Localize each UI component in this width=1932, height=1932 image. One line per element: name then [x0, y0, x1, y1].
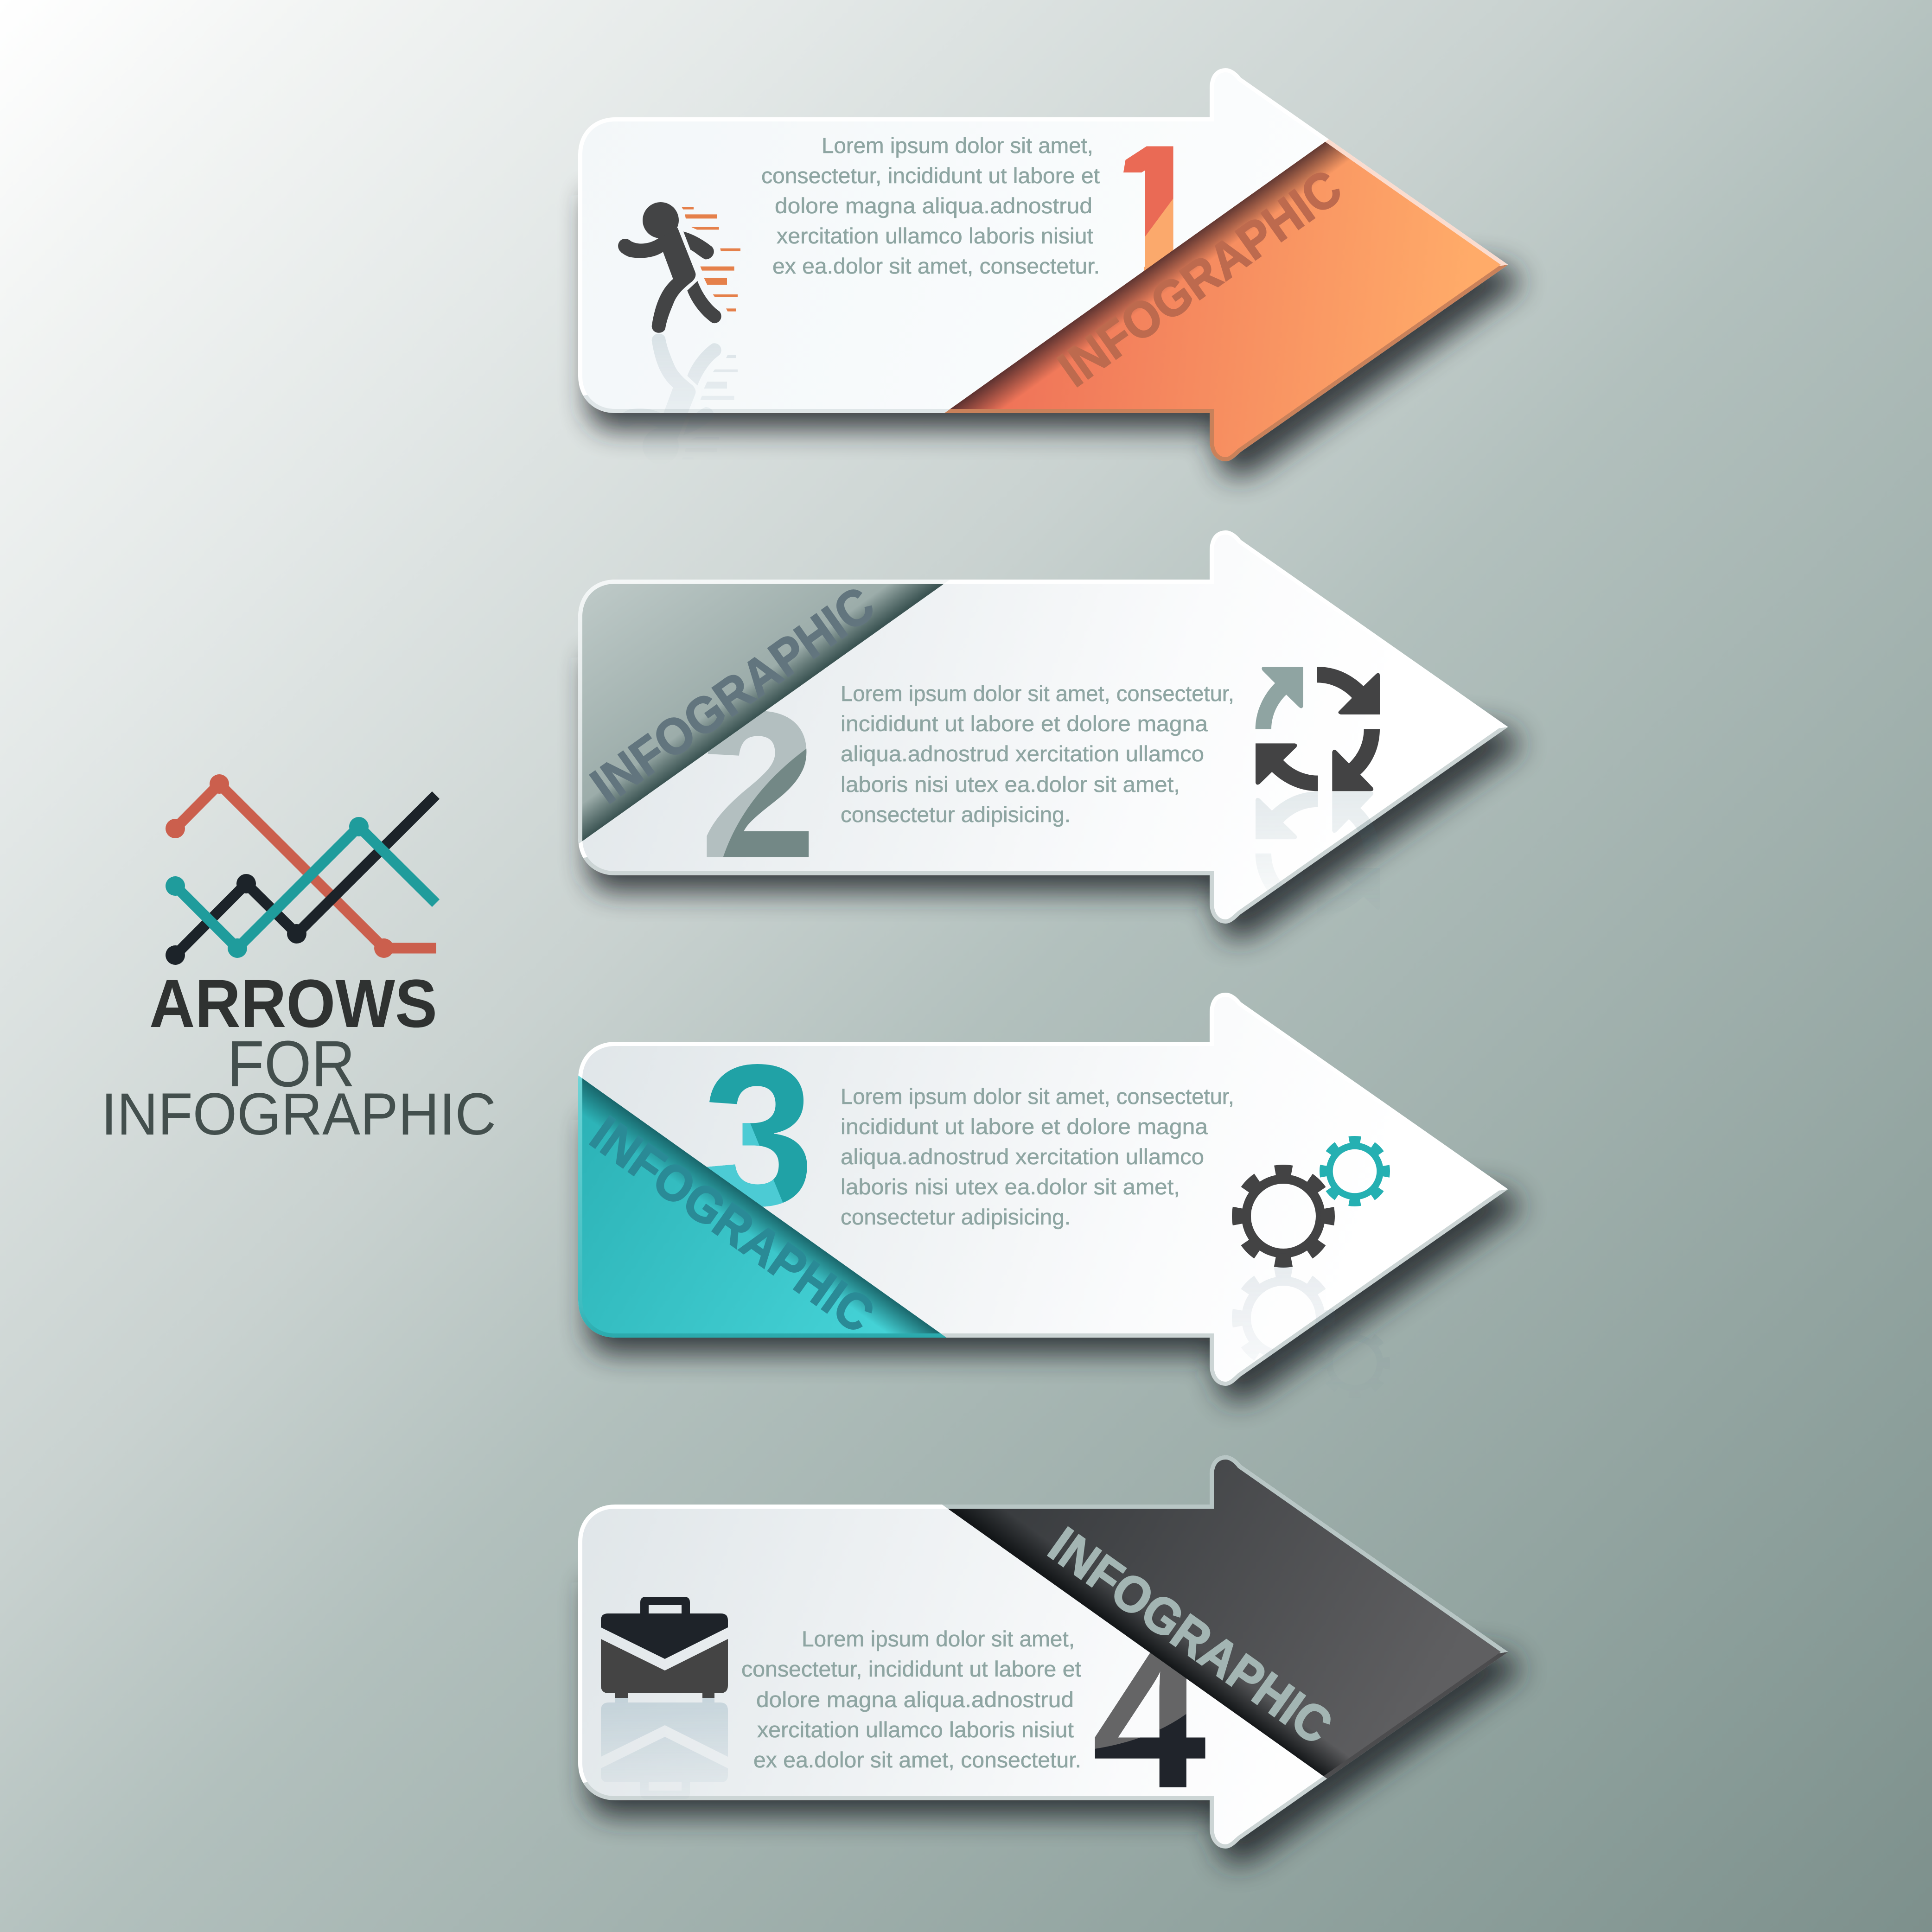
text block 2 — [841, 681, 1234, 827]
numeral 3: 3 — [702, 1022, 814, 1247]
text block 2: Lorem ipsum dolor sit amet, consectetur, — [841, 681, 1234, 706]
text block 3: Lorem ipsum dolor sit amet, consectetur, — [841, 1084, 1234, 1109]
logo: chart and title — [101, 774, 496, 1148]
numeral 3: 3 — [702, 1022, 814, 1247]
title: INFOGRAPHIC: INFOGRAPHIC — [101, 1081, 496, 1148]
text block 3: laboris nisi utex ea.dolor sit amet, — [841, 1174, 1180, 1199]
dark line — [166, 795, 436, 965]
icon reflection: gears — [1239, 1274, 1385, 1394]
text block 1: consectetur, incididunt ut labore et — [761, 163, 1100, 188]
title: ARROWS: ARROWS — [149, 966, 437, 1042]
icon: gears — [1239, 1141, 1385, 1261]
numeral 1: 1 — [1097, 102, 1211, 332]
text block 3: consectetur adipisicing. — [841, 1205, 1071, 1229]
text block 2: incididunt ut labore et dolore magna — [841, 711, 1208, 736]
icon reflection: runner — [623, 334, 738, 413]
numeral 1: 1 — [1097, 102, 1211, 332]
panel: arrow 3 — [580, 997, 1523, 1402]
teal ribbon — [582, 997, 1501, 1382]
numeral 1 — [1123, 147, 1173, 271]
text block 1: xercitation ullamco laboris nisiut — [777, 223, 1093, 248]
orange ribbon — [944, 139, 1508, 461]
numeral 2: 2 — [701, 670, 816, 900]
text block 1: Lorem ipsum dolor sit amet, — [822, 133, 1093, 158]
text block 4: ex ea.dolor sit amet, consectetur. — [753, 1747, 1081, 1772]
teal line — [166, 817, 436, 958]
text block 4 — [741, 1626, 1081, 1772]
panel: arrow 4 — [582, 1460, 1523, 1865]
red line — [166, 774, 436, 958]
text block 4: xercitation ullamco laboris nisiut — [757, 1717, 1074, 1742]
text block 1: dolore magna aliqua.adnostrud — [775, 193, 1092, 218]
icon: runner — [618, 202, 740, 333]
text block 3: incididunt ut labore et dolore magna — [841, 1114, 1208, 1139]
icon: cycle arrows — [1256, 667, 1380, 791]
ribbon label: INFOGRAPHIC — [580, 1105, 884, 1344]
text block 2: consectetur adipisicing. — [841, 802, 1071, 827]
text block 4: Lorem ipsum dolor sit amet, — [802, 1626, 1075, 1651]
text block 4: dolore magna aliqua.adnostrud — [756, 1687, 1074, 1712]
text block 3 — [841, 1084, 1234, 1229]
ribbon label: INFOGRAPHIC — [581, 576, 885, 815]
text block 1: ex ea.dolor sit amet, consectetur. — [772, 254, 1100, 278]
text block 4: consectetur, incididunt ut labore et — [741, 1657, 1081, 1681]
dark ribbon — [582, 1460, 1501, 1844]
icon reflection: briefcase — [601, 1698, 728, 1799]
ribbon label: INFOGRAPHIC — [1048, 159, 1352, 398]
ribbon label: INFOGRAPHIC — [1039, 1516, 1342, 1755]
text block 2: aliqua.adnostrud xercitation ullamco — [841, 741, 1204, 766]
title: FOR: FOR — [227, 1027, 355, 1100]
grey ribbon — [582, 535, 1501, 919]
numeral 4: 4 — [1092, 1601, 1208, 1831]
icon reflection: cycle arrows — [1256, 791, 1380, 916]
icon: briefcase — [601, 1597, 728, 1698]
panel: arrow 1 — [582, 72, 1523, 478]
text block 2: laboris nisi utex ea.dolor sit amet, — [841, 772, 1180, 797]
numeral 2: 2 — [701, 670, 816, 900]
text block 3: aliqua.adnostrud xercitation ullamco — [841, 1144, 1204, 1169]
text block 1 — [761, 133, 1100, 278]
line chart icon — [166, 774, 436, 965]
panel: arrow 2 — [581, 535, 1523, 940]
numeral 4: 4 — [1092, 1601, 1208, 1831]
